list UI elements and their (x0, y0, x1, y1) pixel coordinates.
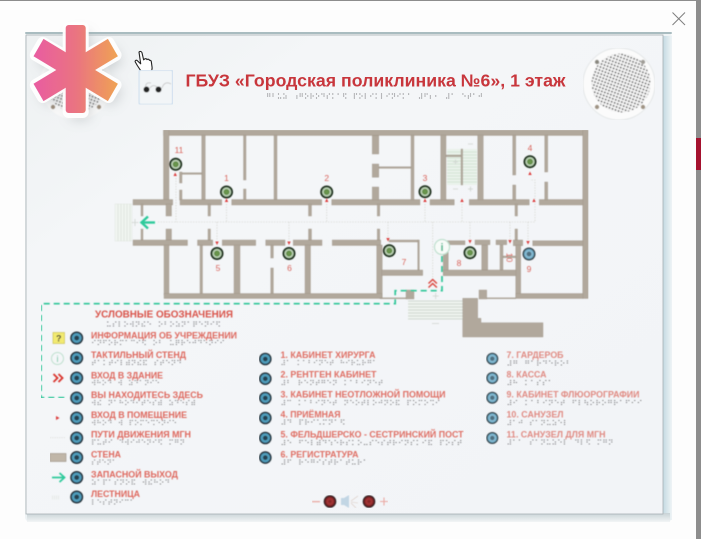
icon: tactile stand (434, 240, 450, 254)
cursor hand icon (135, 51, 152, 72)
braille: ⠼⠛⠀⠛⠁⠗⠙⠑⠗⠕⠃ (506, 360, 572, 368)
labels: 4. ПРИЁМНАЯ (280, 409, 341, 420)
speaker right (583, 48, 655, 120)
legend labels: ЗАПАСНОЙ ВЫХОД (91, 469, 178, 481)
room markers (169, 155, 536, 260)
room numbers: 6 (287, 263, 292, 273)
legend braille: ⠺⠮⠀⠝⠁⠓⠕⠙⠊⠞⠑⠎⠾⠀⠵⠙⠑⠎⠾ (91, 400, 196, 408)
emergency route dashed line (41, 256, 442, 398)
legend labels: СТЕНА (91, 450, 121, 460)
labels: 7. ГАРДЕРОБ (506, 350, 564, 361)
legend labels: ЛЕСТНИЦА (91, 489, 140, 500)
labels: 11. САНУЗЕЛ ДЛЯ МГН (506, 430, 606, 440)
legend braille (91, 340, 225, 507)
labels: 10. САНУЗЕЛ (506, 410, 564, 420)
labels: 9. КАБИНЕТ ФЛЮОРОГРАФИИ (506, 390, 640, 400)
braille: ⠼⠙⠀⠏⠗⠊⠡⠍⠝⠁⠫ (280, 419, 346, 427)
braille: ⠼⠃⠀⠗⠑⠝⠞⠛⠑⠝⠀⠅⠁⠃⠊⠝⠑⠞ (280, 380, 384, 388)
room numbers: 1 (224, 173, 229, 183)
legend heading: УСЛОВНЫЕ ОБОЗНАЧЕНИЯ (95, 308, 233, 320)
walls (133, 130, 588, 337)
left entrance stairs (115, 204, 132, 241)
room list column 1 (259, 350, 464, 467)
entrance stairs (408, 301, 463, 319)
legend buttons (70, 332, 83, 504)
legend heading braille: ⠥⠎⠇⠕⠺⠝⠮⠑⠀⠕⠃⠕⠵⠝⠁⠟⠑⠝⠊⠫ (106, 321, 221, 329)
room numbers: 8 (457, 258, 462, 268)
logo: asterisk (28, 22, 124, 120)
braille: ⠼⠁⠁⠀⠎⠁⠝⠥⠵⠑⠇⠀⠙⠇⠫⠀⠍⠛⠝ (506, 439, 614, 447)
icon: building entrance chevrons (428, 280, 437, 288)
legend labels (91, 330, 237, 500)
legend braille: ⠞⠁⠅⠞⠊⠇⠾⠝⠮⠯⠀⠎⠞⠑⠝⠙ (91, 360, 182, 368)
braille: ⠼⠊⠀⠅⠁⠃⠊⠝⠑⠞⠀⠋⠇⠳⠕⠗⠕⠛⠗⠁⠋⠊⠊ (506, 400, 642, 408)
labels (280, 350, 464, 460)
emergency exit arrow (142, 216, 155, 228)
legend braille: ⠊⠝⠋⠕⠗⠍⠁⠉⠊⠫⠀⠕⠃⠀⠥⠟⠗⠑⠚⠙⠑⠝⠊⠊ (91, 340, 225, 348)
room numbers: 7 (402, 257, 407, 267)
labels: 1. КАБИНЕТ ХИРУРГА (280, 350, 376, 361)
labels: 2. РЕНТГЕН КАБИНЕТ (280, 370, 377, 381)
plus and minus marks (132, 144, 473, 324)
legend braille: ⠺⠓⠕⠙⠀⠺⠀⠵⠙⠁⠝⠊⠑ (91, 380, 160, 388)
icon: tactile stand: i (440, 242, 444, 254)
volume control (312, 495, 388, 508)
room numbers: 10 (504, 253, 514, 262)
legend braille: ⠵⠁⠏⠁⠎⠝⠕⠯⠀⠺⠮⠓⠕⠙ (91, 479, 170, 487)
legend labels: ИНФОРМАЦИЯ ОБ УЧРЕЖДЕНИИ (91, 330, 237, 342)
entry triangles (174, 172, 536, 245)
room numbers: 4 (528, 143, 533, 153)
braille (280, 360, 462, 467)
room numbers: 11 (175, 145, 184, 155)
central stairs (447, 149, 477, 185)
room numbers: 2 (324, 173, 329, 183)
title braille: ⠛⠃⠥⠵⠀⠰⠛⠕⠗⠕⠙⠎⠅⠁⠫⠀⠏⠕⠇⠊⠅⠇⠊⠝⠊⠅⠁⠀⠼⠋⠆⠂⠀⠼⠁⠀⠑⠞⠁⠚ (266, 93, 483, 101)
labels: 5. ФЕЛЬДШЕРСКО - СЕСТРИНСКИЙ ПОСТ (280, 429, 464, 441)
room list column 2 (486, 350, 642, 447)
legend labels: ВХОД В ЗДАНИЕ (91, 370, 163, 382)
legend labels: ВЫ НАХОДИТЕСЬ ЗДЕСЬ (91, 390, 203, 401)
braille: ⠼⠋⠀⠗⠑⠛⠊⠎⠞⠗⠁⠞⠥⠗⠁ (280, 459, 368, 467)
labels: 6. РЕГИСТРАТУРА (280, 449, 359, 460)
braille: ⠼⠓⠀⠅⠁⠎⠎⠁ (506, 380, 554, 388)
labels: 8. КАССА (506, 370, 547, 381)
braille (506, 360, 642, 447)
legend icons: ? (56, 334, 61, 344)
speaker left behind logo (40, 48, 112, 120)
legend braille: ⠇⠑⠎⠞⠝⠊⠉⠁ (91, 499, 135, 507)
room numbers: 5 (216, 263, 221, 273)
braille: ⠼⠑⠀⠋⠑⠇⠾⠙⠱⠑⠗⠎⠅⠕⠤⠎⠑⠎⠞⠗⠊⠝⠎⠅⠊⠯⠀⠏⠕⠎⠞ (280, 440, 462, 448)
buttons (486, 353, 498, 444)
legend labels: ТАКТИЛЬНЫЙ СТЕНД (91, 349, 186, 361)
legend icons: i (56, 354, 58, 364)
legend braille: ⠺⠓⠕⠙⠀⠺⠀⠏⠕⠍⠑⠩⠑⠝⠊⠑ (91, 420, 177, 428)
braille: ⠼⠁⠚⠀⠎⠁⠝⠥⠵⠑⠇ (506, 420, 568, 428)
legend braille: ⠎⠞⠑⠝⠁ (91, 459, 117, 467)
legend panel (50, 308, 237, 507)
room numbers: 3 (423, 173, 428, 183)
icon: glasses box (139, 70, 173, 104)
braille: ⠼⠉⠀⠅⠁⠃⠊⠝⠑⠞⠀⠝⠑⠕⠞⠇⠕⠚⠝⠕⠯⠀⠏⠕⠍⠕⠩⠊ (280, 400, 440, 408)
legend labels: ПУТИ ДВИЖЕНИЯ МГН (91, 430, 191, 441)
legend braille: ⠏⠥⠞⠊⠀⠙⠺⠊⠚⠑⠝⠊⠫⠀⠍⠛⠝ (91, 439, 185, 447)
title: ГБУЗ «Городская поликлиника №6», 1 этаж (186, 71, 566, 91)
labels: 3. КАБИНЕТ НЕОТЛОЖНОЙ ПОМОЩИ (280, 389, 446, 401)
legend icons (50, 332, 66, 498)
labels (506, 350, 640, 440)
floor plan (41, 130, 588, 398)
room numbers: 9 (527, 264, 532, 274)
buttons (259, 353, 272, 464)
braille: ⠼⠁⠀⠅⠁⠃⠊⠝⠑⠞⠀⠓⠊⠗⠥⠗⠛⠁ (280, 360, 378, 368)
close button (672, 12, 685, 25)
room numbers (175, 143, 533, 274)
route lines (158, 178, 535, 278)
legend labels: ВХОД В ПОМЕЩЕНИЕ (91, 410, 187, 421)
